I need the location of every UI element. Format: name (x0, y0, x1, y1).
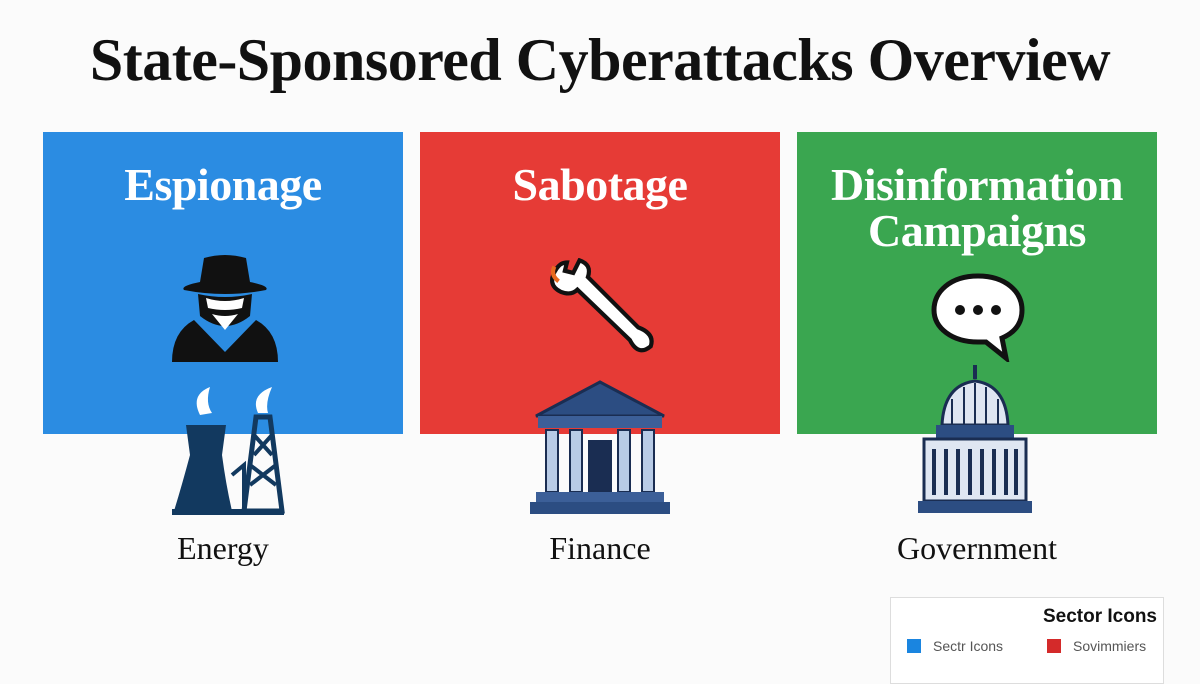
legend title: Sector Icons (1043, 606, 1157, 627)
heading: disinformation (831, 159, 1123, 256)
panel: sabotage (420, 132, 780, 434)
icon: energy plant (172, 387, 285, 515)
icon: bank (530, 380, 670, 514)
icon: speech bubble (932, 274, 1024, 362)
panel: disinformation (797, 132, 1157, 434)
heading: sabotage: Sabotage (513, 159, 687, 210)
legend (890, 597, 1164, 684)
legend item: red: Sovimmiers (1073, 638, 1146, 654)
heading: disinformation: Disinformation (831, 159, 1123, 210)
title: State-Sponsored Cyberattacks Overview (90, 27, 1110, 93)
icon: wrench (550, 258, 654, 352)
label: finance: Finance (549, 530, 651, 566)
heading: espionage: Espionage (124, 159, 322, 210)
label: energy: Energy (177, 530, 269, 566)
icon: capitol (918, 365, 1032, 513)
label: government: Government (897, 530, 1057, 566)
panel: espionage (43, 132, 403, 434)
heading: disinformation: Campaigns (868, 205, 1086, 256)
legend item: blue: Sectr Icons (933, 638, 1003, 654)
icon: spy (172, 255, 278, 362)
